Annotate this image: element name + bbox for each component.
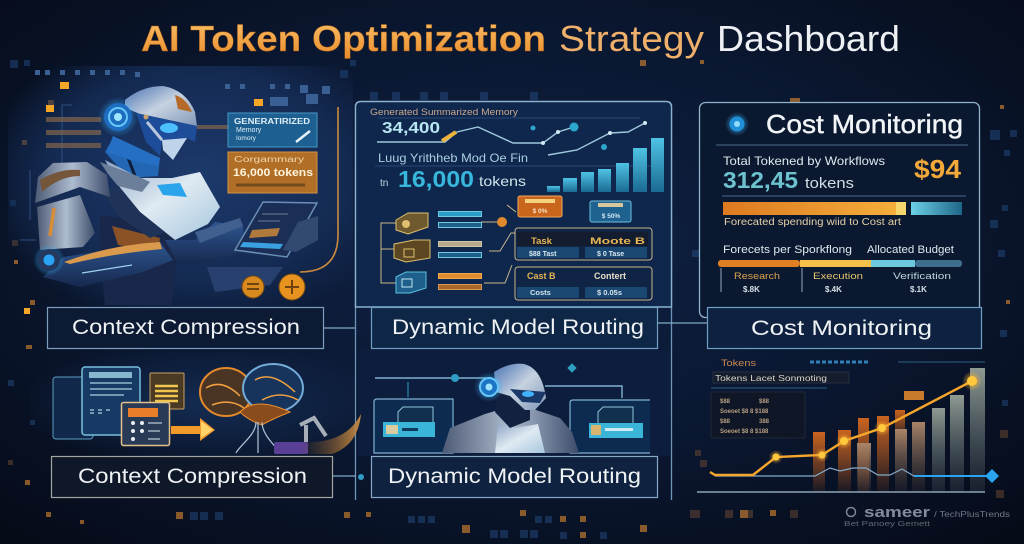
card: right route [570,400,650,453]
callout: blue percentage: $ 50% [602,213,620,220]
text: total tokens: Total Tokened by Workflows [723,154,885,168]
panel: dynamic model routing [356,102,672,500]
heading: cost monitoring: Cost Monitoring [766,109,963,139]
metric: 34,400: 34,400 [382,120,440,137]
table: task and model: $88 Tast [529,251,557,258]
data list: $88 [759,399,770,405]
metric: 312,45 tokens: 312,45 [723,167,798,193]
label: dynamic model routing lower: Dynamic Model Routing [388,465,641,488]
bar chart [547,138,664,192]
card: generated memory: Iomory [236,135,257,142]
metric: 16,000 tokens: tn [380,178,388,189]
icons: gold coins [242,274,305,300]
label: dynamic model routing lower [372,456,658,498]
watermark [844,504,1010,528]
panel: compression illustration [30,352,361,456]
icon: purple base and curve [274,414,361,454]
budget breakdown: Research [734,271,780,282]
data list [711,392,805,438]
budget breakdown: Verification [893,271,951,282]
table: task and model: Moote B [590,236,645,247]
card: generated memory: GENERATIRIZED [234,117,310,126]
panel: cost monitoring [700,102,980,318]
table: task and model: $ 0 Tase [597,251,624,258]
card: generated memory [228,113,317,147]
data list: 388 [759,419,770,425]
label: context compression lower: Context Compression [78,465,307,488]
watermark: sameer [864,504,930,521]
title: Dashboard [717,18,900,59]
table: cost and content: Contert [594,271,626,281]
metric: 312,45 tokens [723,167,854,193]
text: generated summarized memory: Generated Summarized Memory [370,107,518,118]
data list: $88 [720,399,731,405]
metric: 16,000 tokens: 16,000 [398,166,474,192]
text: forecast note: Forecated spending wiid to Cost art [724,217,901,228]
watermark: / TechPlusTrends [934,510,1010,519]
icon: orange arrow [171,418,215,441]
stacked budget bar [718,260,962,267]
card: left route [374,399,453,453]
card: generated memory: Memory [236,127,262,134]
text: forecast headers [723,244,954,256]
card: 16,000 tokens: Corgammary [234,155,304,164]
bar chart: token spend [813,368,985,492]
label: cost monitoring [708,308,982,348]
icon: robot bust [442,364,579,453]
line chart [377,121,647,155]
table: cost and content [515,267,652,300]
label: cost monitoring: Cost Monitoring [751,317,932,340]
callout: blue percentage [590,201,631,222]
table: task and model: Task [531,236,553,247]
metric: $94: $94 [914,154,962,184]
label: dynamic model routing [372,308,658,348]
budget breakdown: $.8K [743,285,760,294]
text: forecast headers: Forecets per Sporkflong [723,244,852,256]
text: tokens subtitle [713,372,849,383]
table: cost and content: Costs [530,288,551,297]
data list: $88 [720,419,731,425]
text: subtitle: Luug Yrithheb Mod Oe Fin [378,151,528,165]
table: task and model [515,228,652,260]
metric: 16,000 tokens [380,166,526,192]
icon: documents [53,367,184,446]
connector lines [323,323,707,476]
table: cost and content: Cast B [527,271,556,281]
icon: box 1 [396,213,428,234]
text: tokens: Tokens [721,358,756,369]
text: forecast headers: Allocated Budget [867,244,954,256]
icon: box 3 [396,272,426,293]
label: dynamic model routing: Dynamic Model Routing [392,316,644,339]
title: Strategy [559,18,704,59]
trend lines [697,371,999,492]
callout: orange percentage: $ 0% [533,208,548,215]
budget breakdown: $.4K [825,285,842,294]
label: context compression lower [52,456,332,498]
budget breakdown: Execution [813,271,863,282]
panel: context compression robot [8,66,353,314]
panel: routing illustration [374,364,650,453]
icon: box 2 [394,240,430,262]
icon: brain [200,364,326,453]
text: tokens subtitle: Tokens Lacet Sonmoting [715,373,827,383]
callout: orange percentage [518,196,562,217]
data list: Soeoet $8 8 $188 [720,429,769,435]
icon: robot [33,86,318,305]
panel: tokens chart [697,358,999,492]
title [141,18,900,59]
label: context compression [48,308,324,348]
metric: 16,000 tokens: tokens [479,173,526,189]
bar: forecast spending [723,202,962,215]
routing diagram [381,205,518,293]
title: AI Token Optimization [141,18,546,59]
metric: 312,45 tokens: tokens [805,175,854,192]
budget breakdown: $.1K [910,285,927,294]
card: 16,000 tokens [228,152,317,193]
table: cost and content: $ 0.05s [597,288,622,297]
icon: blue target [725,112,749,136]
watermark: Bet Panoey Gemett [844,521,930,528]
data list: Soeoet $8 8 $188 [720,409,769,415]
label: context compression: Context Compression [72,316,300,339]
budget breakdown [721,268,951,294]
card: 16,000 tokens: 16,000 tokens [233,167,313,179]
